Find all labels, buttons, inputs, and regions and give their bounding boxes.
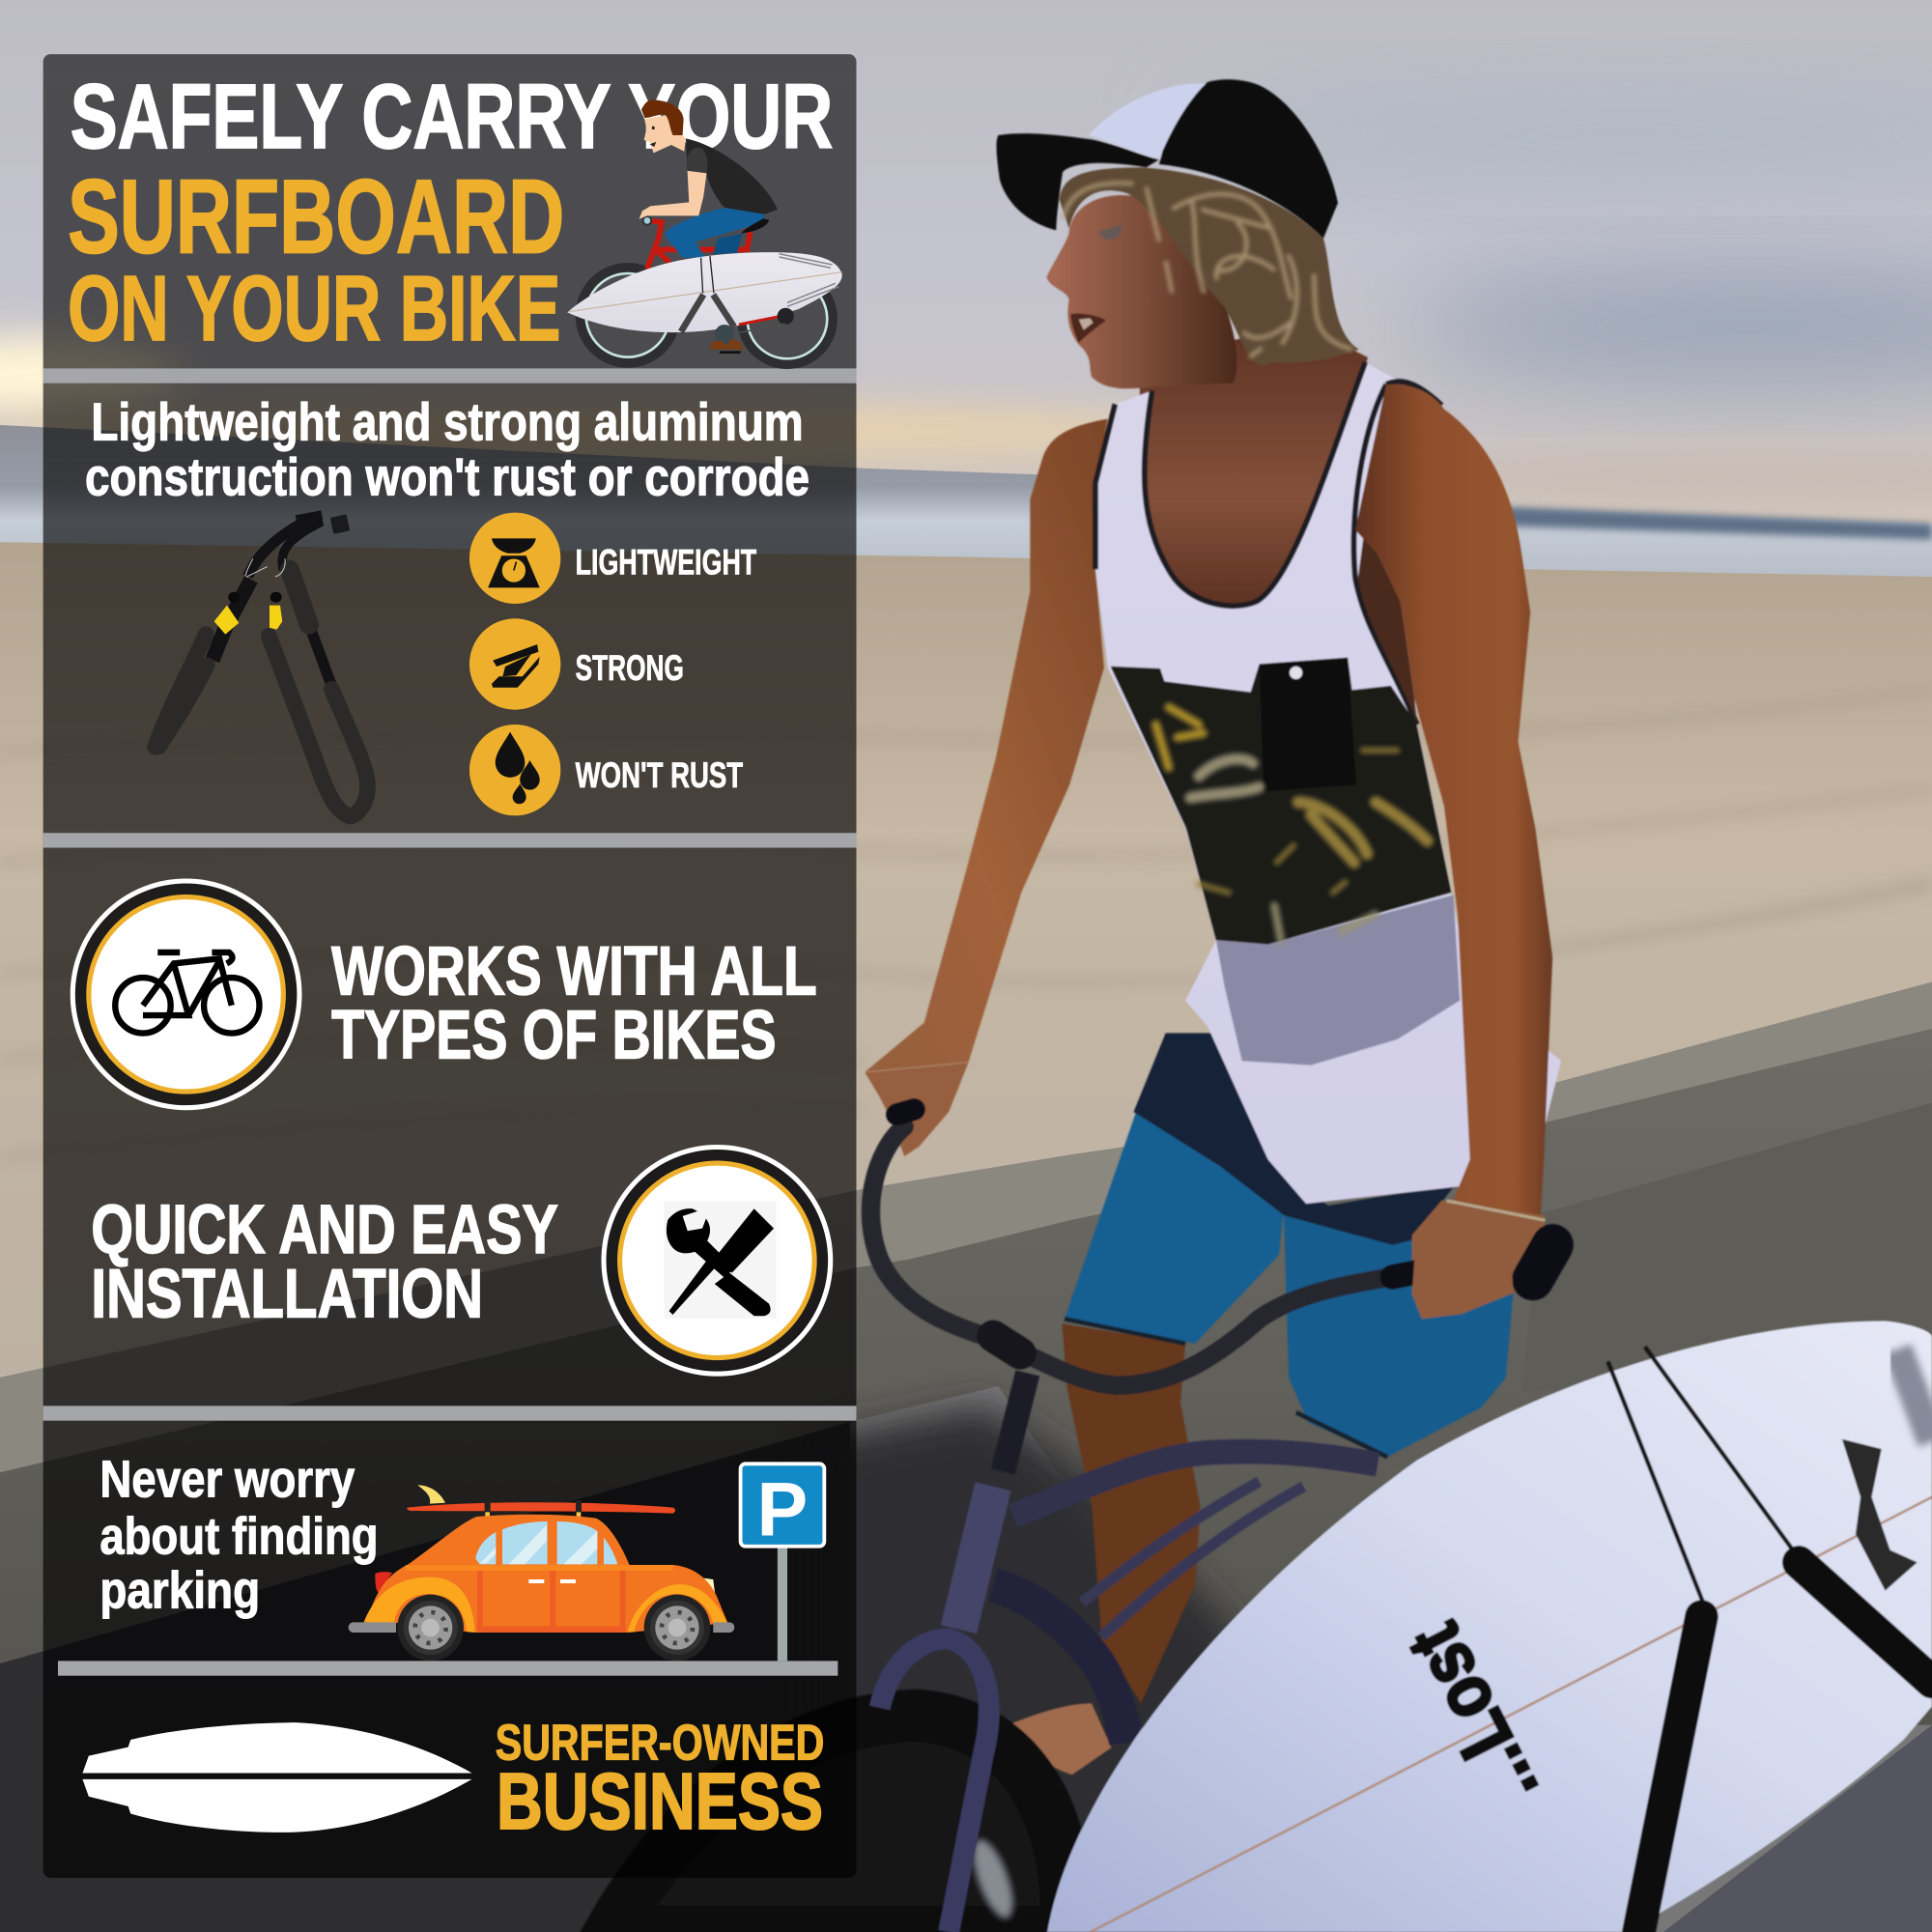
sand ripples — [0, 690, 1932, 1158]
left hand — [865, 1063, 969, 1156]
sky — [0, 0, 1932, 579]
label: LIGHTWEIGHT — [576, 542, 756, 582]
feature: strong — [469, 618, 684, 710]
chest and neck — [1140, 327, 1368, 610]
pads — [1638, 1562, 1932, 1932]
chain guard — [739, 316, 781, 325]
door handles — [528, 1579, 576, 1583]
near leg — [665, 208, 765, 258]
panel: lightweight and strong — [85, 391, 810, 816]
surfboard — [1047, 1321, 1932, 1932]
tail logo mark — [1842, 1439, 1918, 1591]
pocket button — [1290, 667, 1302, 679]
door seams — [477, 1571, 626, 1633]
blonde strands — [1063, 183, 1352, 357]
text: business: BUSINESS — [497, 1756, 823, 1846]
clamp and upper tubes — [213, 515, 331, 686]
sand — [0, 542, 1932, 1378]
windows — [475, 1521, 617, 1564]
illustration: car with surfboard — [349, 1485, 734, 1661]
title line 1: SAFELY CARRY YOUR — [71, 67, 833, 168]
title line 2: SURFBOARD — [68, 157, 564, 274]
roof board — [407, 1502, 675, 1514]
hair — [641, 99, 684, 135]
clamp head — [330, 514, 350, 534]
eye — [1098, 224, 1123, 240]
text: never worry: Never worry — [99, 1452, 355, 1509]
bike frame — [958, 1373, 1378, 1743]
cap front panel — [1089, 83, 1208, 159]
leaves — [1155, 707, 1428, 940]
side chest shadow — [1358, 524, 1417, 722]
tail stripes — [1897, 1350, 1932, 1441]
text: works with all: WORKS WITH ALL — [331, 932, 817, 1009]
icon: water drops — [496, 732, 540, 804]
bike frame — [647, 220, 751, 269]
right arm — [1355, 384, 1552, 1220]
stringer — [1091, 1497, 1932, 1932]
text: types of bikes: TYPES OF BIKES — [331, 997, 777, 1074]
grip — [643, 216, 651, 225]
sleeve — [687, 148, 708, 173]
text: parking: parking — [99, 1563, 260, 1620]
icon: wrench and screwdriver — [667, 1208, 774, 1316]
head — [997, 79, 1359, 388]
right hand — [1412, 1201, 1545, 1319]
foot — [1012, 1703, 1112, 1775]
pavement — [1663, 1725, 1932, 1932]
bike parts — [865, 1063, 1552, 1743]
text: surfer-owned: SURFER-OWNED — [496, 1715, 824, 1771]
product: surf rack — [156, 514, 367, 816]
panel: header — [68, 67, 842, 364]
illustration: rider with surfboard — [567, 99, 842, 364]
lower body — [1012, 1033, 1513, 1775]
bracelet — [1446, 1201, 1545, 1220]
sea — [0, 425, 1932, 579]
panel background — [43, 54, 856, 1878]
body — [367, 1565, 727, 1633]
crank — [715, 325, 734, 344]
teeth — [1079, 318, 1094, 330]
front lamp — [702, 1577, 716, 1597]
heading line 2: construction won't rust or corrode — [85, 447, 810, 507]
hub reflection — [965, 1834, 1021, 1923]
parking sign — [741, 1463, 824, 1661]
bike wheel — [610, 1716, 1066, 1932]
wires — [245, 558, 285, 577]
badge: bike — [72, 881, 299, 1108]
cabin — [408, 1515, 630, 1565]
road line — [58, 1661, 838, 1676]
redraw of right fingers over bar — [1412, 1240, 1513, 1319]
eye and smile — [650, 127, 656, 147]
seat — [744, 219, 768, 232]
arm — [639, 171, 707, 219]
pedal — [720, 351, 741, 354]
left arm — [865, 419, 1108, 1072]
feature: won't rust — [469, 724, 743, 815]
roof board fin — [417, 1485, 445, 1504]
foam pads — [156, 570, 367, 816]
mouth — [1070, 314, 1106, 343]
hair — [1060, 167, 1359, 365]
shoes — [710, 339, 744, 350]
belt line — [406, 1565, 673, 1571]
chain — [727, 324, 785, 335]
shorts right leg — [1284, 1215, 1513, 1457]
yellow clips — [214, 606, 282, 635]
bungee knots — [234, 582, 276, 612]
mini surfboard — [567, 252, 842, 332]
face — [1046, 195, 1236, 388]
ground — [0, 1405, 1355, 1932]
straps — [701, 256, 714, 293]
torso — [686, 138, 778, 214]
leg — [1062, 1323, 1200, 1703]
tank top — [1095, 362, 1561, 1204]
panel: compatibility and installation — [72, 881, 831, 1374]
shorts hems — [1065, 1319, 1387, 1457]
label: STRONG — [576, 648, 684, 688]
roof straps — [485, 1500, 582, 1512]
front wheel — [644, 1595, 710, 1661]
grey band — [1216, 895, 1460, 1065]
shorts left leg — [1065, 1112, 1284, 1344]
bike wheels — [581, 268, 833, 364]
text: about finding: about finding — [99, 1508, 379, 1565]
board stripes — [780, 254, 838, 306]
board stringer — [568, 272, 842, 312]
shorts dark hip stripes — [1133, 1033, 1457, 1245]
pocket — [1260, 658, 1356, 791]
feature: lightweight — [469, 513, 756, 604]
sea wall — [0, 982, 1932, 1725]
icon: bicycle — [115, 952, 259, 1034]
divider bars — [43, 368, 856, 1421]
parking sign: P — [757, 1465, 808, 1551]
badge: tools — [604, 1148, 831, 1374]
board logo: ...Lost — [1390, 1611, 1553, 1820]
fork — [880, 1638, 989, 1932]
panel: surfer-owned — [82, 1715, 824, 1846]
man with bike and surfboard — [610, 79, 1932, 1932]
title line 3: ON YOUR BIKE — [68, 257, 560, 360]
text: quick and easy: QUICK AND EASY — [91, 1191, 558, 1268]
floral band — [1111, 658, 1451, 945]
rear fender — [364, 1577, 475, 1632]
window glare — [480, 1524, 597, 1564]
strap feet — [485, 1512, 581, 1517]
handlebars — [870, 1109, 1552, 1385]
icon: steel beam — [492, 644, 540, 688]
label: WON'T RUST — [576, 755, 743, 795]
panel: parking — [58, 1452, 838, 1676]
tank trim — [1095, 362, 1441, 724]
rear gear — [778, 308, 794, 325]
head — [644, 114, 686, 153]
rear lamp — [375, 1572, 392, 1592]
icon: surfboard silhouette — [82, 1722, 472, 1833]
rear wheel — [397, 1595, 464, 1661]
straps — [1608, 1347, 1793, 1602]
shirt panels — [1111, 658, 1460, 1065]
far leg — [713, 234, 742, 254]
rack arms — [681, 295, 734, 331]
icon: kitchen scale — [488, 538, 540, 587]
text: installation: INSTALLATION — [91, 1256, 483, 1333]
cap brim — [997, 133, 1159, 230]
bumpers — [349, 1622, 734, 1633]
heading line 1: Lightweight and strong aluminum — [91, 391, 804, 451]
front fender — [628, 1584, 727, 1632]
cap crown — [1159, 79, 1338, 239]
